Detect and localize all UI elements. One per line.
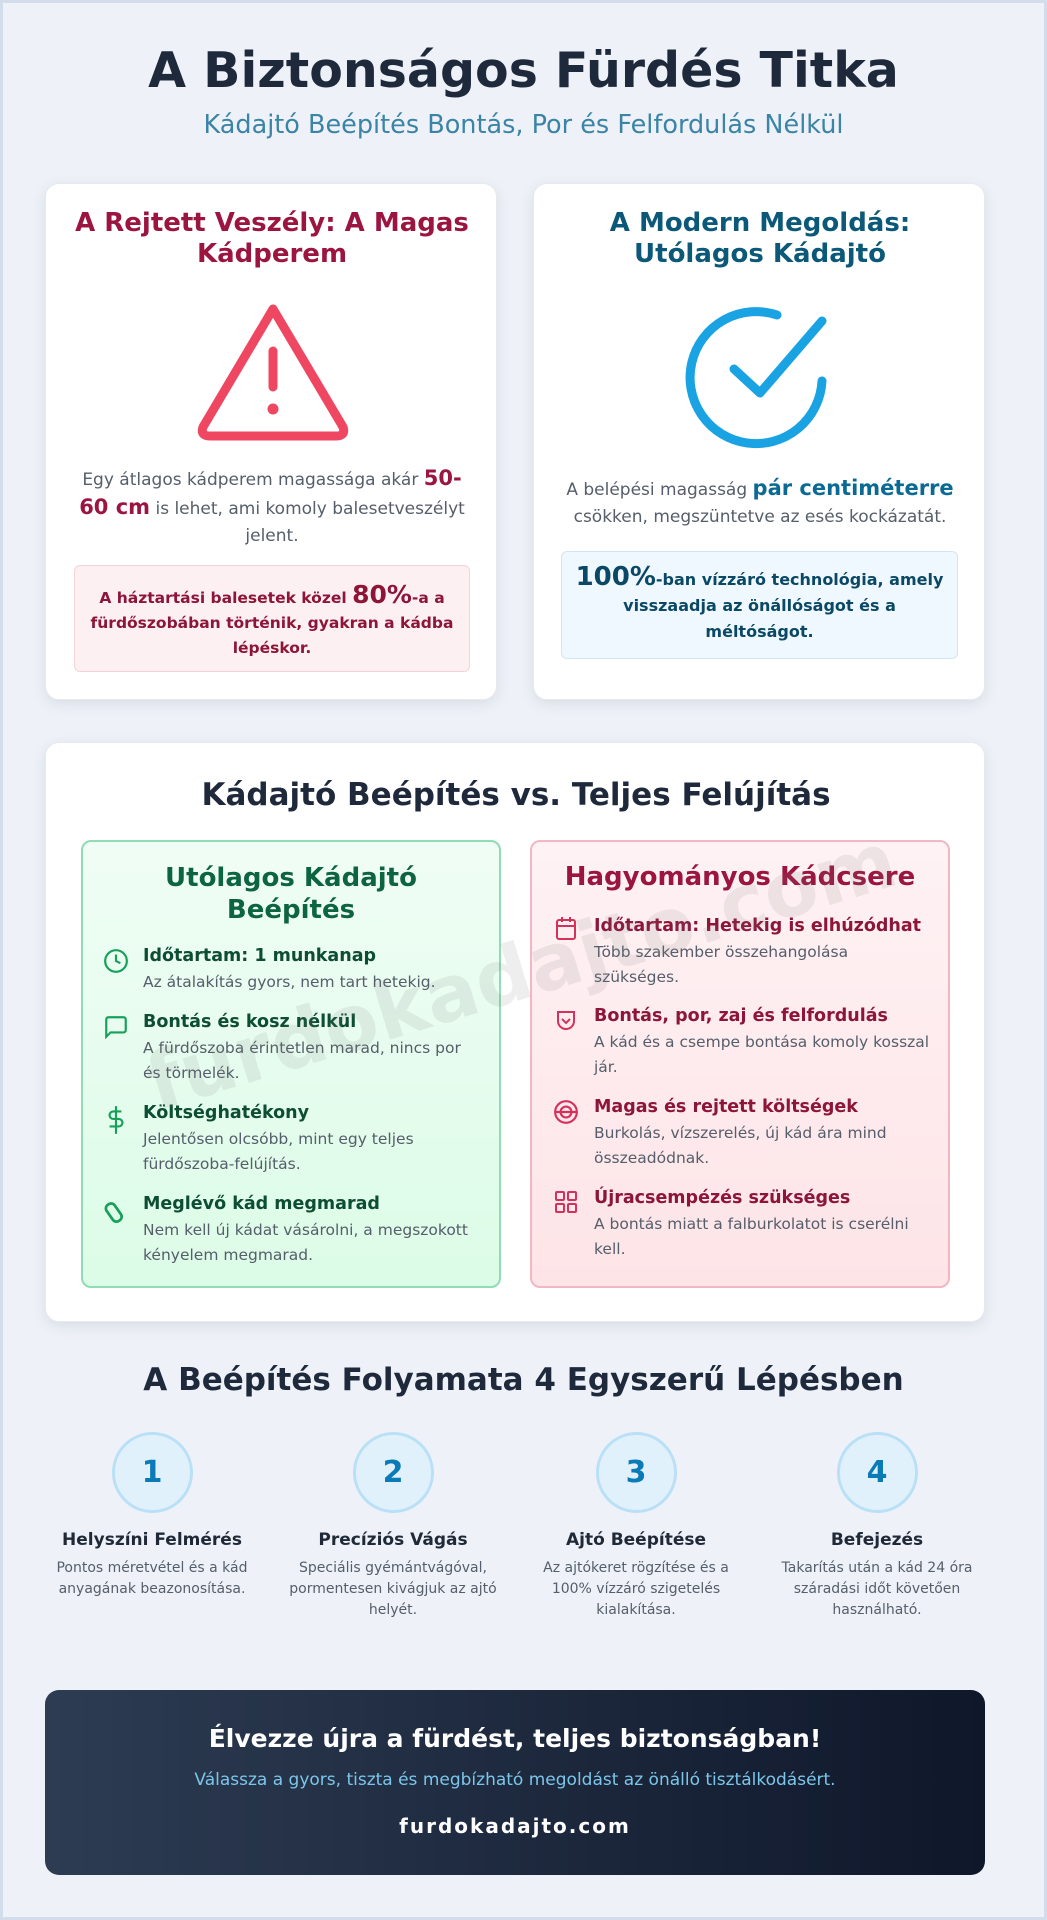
step 4: Befejezés: [831, 1530, 923, 1550]
watermark: furdokadajto.com: [136, 815, 907, 1129]
panel: comparison: [45, 742, 985, 1322]
heading: solution: A Modern Megoldás: Utólagos Kádajtó: [610, 208, 910, 269]
step 2: 2: [383, 1455, 403, 1490]
footer banner: [45, 1690, 985, 1875]
heading: door install: Utólagos Kádajtó Beépítés: [165, 863, 417, 925]
panel: door install: [81, 840, 501, 1288]
step 2: Speciális gyémántvágóval, pormentesen kivágjuk az ajtó helyét.: [289, 1560, 497, 1618]
footer url: furdokadajto.com: [399, 1814, 631, 1838]
panel: traditional: Több szakember összehangolása szükséges.: [594, 943, 848, 986]
item: no dust: [105, 1012, 461, 1082]
panel: solution: [533, 183, 985, 700]
panel: traditional: Újracsempézés szükséges: [594, 1188, 850, 1208]
panel: danger: [45, 183, 497, 700]
step 3: Ajtó Beépítése: [566, 1530, 706, 1550]
panel: door install: Meglévő kád megmarad: [143, 1194, 380, 1214]
item: costs: [554, 1097, 887, 1167]
item: keep tub: [104, 1194, 468, 1264]
heading: danger: A Rejtett Veszély: A Magas Kádperem: [75, 208, 469, 269]
step 3: Az ajtókeret rögzítése és a 100% vízzáró szigetelés kialakítása.: [543, 1560, 729, 1618]
step 3: [543, 1432, 729, 1618]
step 1: [56, 1432, 248, 1597]
text: solution: A belépési magasság pár centiméterre csökken, megszüntetve az esés kockázatát.: [566, 476, 954, 527]
heading: traditional: Hagyományos Kádcsere: [565, 862, 915, 892]
callout: 80%: [74, 565, 470, 672]
subtitle: Kádajtó Beépítés Bontás, Por és Felfordulás Nélkül: [203, 110, 844, 140]
step 2: Precíziós Vágás: [318, 1530, 468, 1550]
icon: warning triangle: [198, 304, 348, 440]
footer heading: Élvezze újra a fürdést, teljes biztonságban!: [209, 1724, 821, 1753]
step 4: [781, 1432, 972, 1618]
text: danger: Egy átlagos kádperem magassága akár 50-60 cm is lehet, ami komoly balesetveszélyt jelent.: [79, 466, 465, 546]
panel: traditional: Burkolás, vízszerelés, új kád ára mind összeadódnak.: [594, 1124, 887, 1167]
step 4: 4: [867, 1455, 887, 1490]
item: retile: [555, 1186, 909, 1258]
title: A Biztonságos Fürdés Titka: [148, 42, 899, 99]
callout: 100%: [561, 551, 958, 659]
icon: check circle: [686, 307, 826, 448]
panel: door install: Jelentősen olcsóbb, mint egy teljes fürdőszoba-felújítás.: [143, 1130, 414, 1173]
heading: comparison: Kádajtó Beépítés vs. Teljes Felújítás: [201, 777, 831, 813]
heading: steps: A Beépítés Folyamata 4 Egyszerű Lépésben: [143, 1362, 904, 1398]
panel: traditional: A bontás miatt a falburkolatot is cserélni kell.: [594, 1215, 909, 1258]
panel: traditional: A kád és a csempe bontása komoly kosszal jár.: [594, 1033, 929, 1076]
item: weeks: [556, 916, 921, 986]
footer subtitle: Válassza a gyors, tiszta és megbízható megoldást az önálló tisztálkodásért.: [194, 1770, 836, 1790]
step 2: [289, 1432, 497, 1618]
step 4: Takarítás után a kád 24 óra száradási időt követően használható.: [782, 1560, 972, 1618]
step 1: Pontos méretvétel és a kád anyagának beazonosítása.: [56, 1560, 248, 1597]
panel: traditional: Magas és rejtett költségek: [594, 1097, 858, 1117]
panel: traditional: Bontás, por, zaj és felfordulás: [594, 1006, 888, 1026]
step 3: 3: [626, 1455, 646, 1490]
panel: door install: Költséghatékony: [143, 1103, 309, 1123]
panel: door install: A fürdőszoba érintetlen marad, nincs por és törmelék.: [143, 1039, 461, 1082]
item: cost: [108, 1103, 414, 1173]
panel: door install: Nem kell új kádat vásárolni, a megszokott kényelem megmarad.: [143, 1221, 468, 1264]
panel: door install: Bontás és kosz nélkül: [143, 1012, 356, 1032]
panel: traditional: Időtartam: Hetekig is elhúzódhat: [594, 916, 921, 936]
callout: 100%: 100%-ban vízzáró technológia, amely visszaadja az önállóságot és a méltóságot.: [576, 562, 943, 641]
step 1: Helyszíni Felmérés: [62, 1530, 242, 1550]
step 1: 1: [142, 1455, 162, 1490]
callout: 80%: A háztartási balesetek közel 80%-a a fürdőszobában történik, gyakran a kádba lépéskor.: [91, 580, 453, 657]
item: dust: [557, 1006, 929, 1076]
panel: door install: Időtartam: 1 munkanap: [143, 946, 376, 966]
item: time: [104, 946, 436, 991]
panel: door install: Az átalakítás gyors, nem tart hetekig.: [143, 973, 436, 991]
panel: traditional: [530, 840, 950, 1288]
